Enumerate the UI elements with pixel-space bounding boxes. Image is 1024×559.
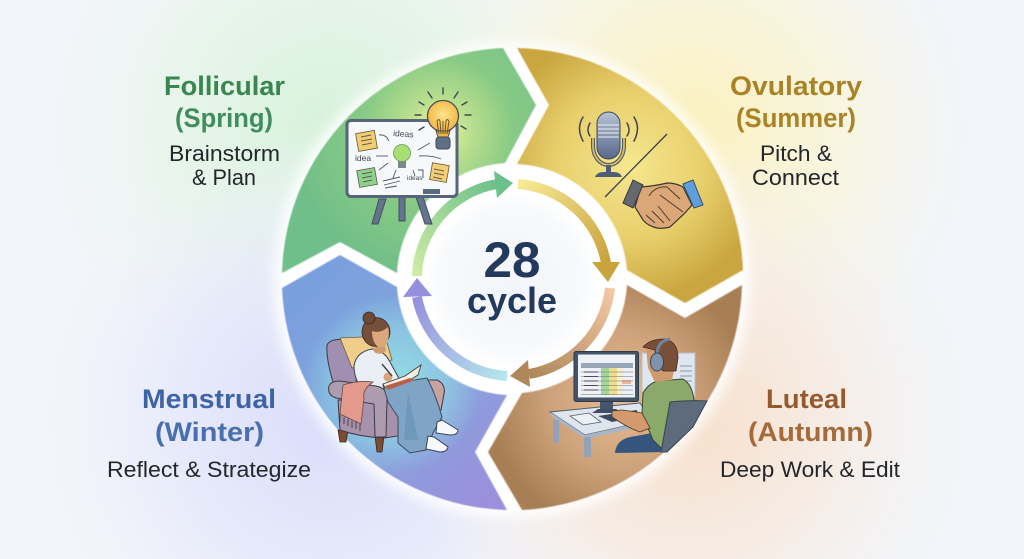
chair right arm xyxy=(415,380,444,410)
arm xyxy=(612,410,650,432)
legs xyxy=(615,433,663,453)
label: follicular spring: (Spring) xyxy=(175,103,273,133)
label: menstrual winter: Reflect & Strategize xyxy=(107,457,311,482)
desk xyxy=(550,403,652,435)
label: ovulatory summer: Pitch & xyxy=(760,141,832,166)
label: ovulatory summer: (Summer) xyxy=(736,103,856,133)
center text: 28 cycle: cycle xyxy=(467,280,557,321)
doodle labels: ideas xyxy=(393,128,414,139)
sweater xyxy=(354,349,402,390)
chair base xyxy=(338,400,398,438)
label: luteal autumn: (Autumn) xyxy=(748,417,873,447)
doodle labels: idea xyxy=(355,153,371,163)
label: luteal autumn: Luteal xyxy=(766,384,847,414)
small green bulb xyxy=(394,144,410,162)
pink throw xyxy=(340,381,373,424)
panel: menstrual segment xyxy=(282,255,507,510)
label: follicular spring: Follicular xyxy=(164,71,285,101)
label: menstrual winter: Menstrual xyxy=(142,384,276,414)
label: ovulatory summer: Connect xyxy=(752,165,839,190)
chair back xyxy=(327,340,358,385)
doodle labels: ideas xyxy=(407,175,423,182)
icon: person at computer xyxy=(550,339,707,457)
label: ovulatory summer: Ovulatory xyxy=(730,71,862,101)
label: menstrual winter: (Winter) xyxy=(155,417,264,447)
headphones xyxy=(657,339,670,358)
neck and head xyxy=(646,347,676,382)
head xyxy=(373,345,386,354)
divider line xyxy=(605,134,667,197)
label: menstrual winter xyxy=(107,384,311,482)
label: follicular spring: Brainstorm xyxy=(169,141,280,166)
blue blanket xyxy=(383,378,442,453)
label: luteal autumn: Deep Work & Edit xyxy=(720,457,900,482)
panel: ovulatory segment xyxy=(517,48,743,303)
center text: 28 cycle: 28 xyxy=(484,232,540,288)
shirt xyxy=(642,379,694,450)
arrow: follicular to ovulatory xyxy=(417,171,513,276)
doodle arrows xyxy=(376,135,441,188)
center text: 28 cycle xyxy=(467,232,557,321)
arrow: ovulatory to luteal xyxy=(518,184,620,282)
rays xyxy=(415,88,471,130)
icon: whiteboard with ideas xyxy=(347,88,471,224)
socks xyxy=(436,420,458,435)
icon: handshake xyxy=(623,180,703,228)
label: luteal autumn xyxy=(720,384,900,482)
center disk xyxy=(425,193,599,367)
panel: follicular segment xyxy=(282,48,536,273)
icon: woman reading in armchair xyxy=(327,312,458,453)
book and hand xyxy=(383,365,421,388)
keyboard xyxy=(598,410,638,422)
arrow: menstrual to follicular xyxy=(403,278,507,376)
paper on desk xyxy=(570,413,601,425)
back monitor xyxy=(642,353,695,397)
sound waves xyxy=(580,117,638,141)
chair left arm xyxy=(329,381,387,437)
monitor xyxy=(600,402,613,410)
doodle labels xyxy=(355,128,423,182)
easel legs xyxy=(372,197,432,224)
arrow: luteal to menstrual xyxy=(510,288,610,387)
white wheel base xyxy=(281,49,743,511)
light bulb xyxy=(428,100,458,132)
label: follicular spring xyxy=(164,71,285,190)
sticky notes xyxy=(356,130,449,187)
icon: microphone xyxy=(580,112,638,177)
chair xyxy=(661,401,707,452)
chair legs xyxy=(338,430,348,442)
board xyxy=(347,120,457,196)
label: follicular spring: & Plan xyxy=(192,165,256,190)
panel: luteal segment xyxy=(488,285,742,510)
label: ovulatory summer xyxy=(730,71,862,190)
